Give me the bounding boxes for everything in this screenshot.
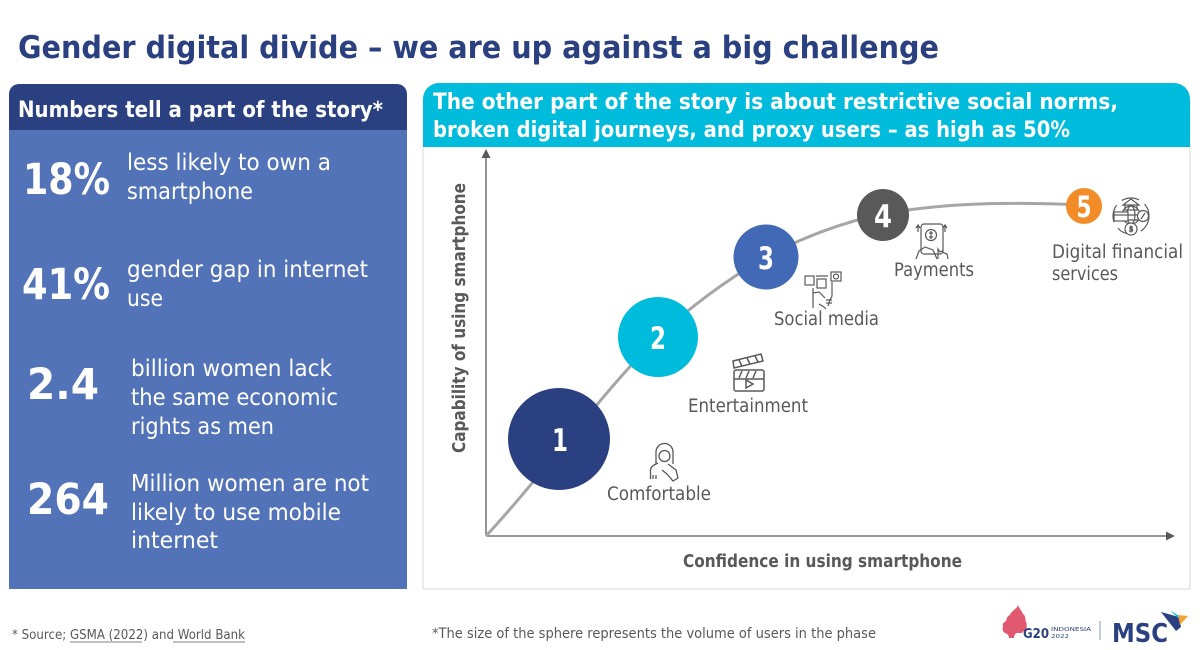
stat: 264: 264 — [27, 475, 109, 525]
icon: payments phone — [916, 224, 948, 259]
icon: clapperboard — [733, 354, 764, 391]
icon: digital finance globe — [1113, 198, 1149, 235]
label: social media: Social media — [774, 309, 879, 330]
panel heading: numbers — [9, 84, 407, 130]
stat: 41% — [22, 257, 368, 312]
label: payments: Payments — [894, 260, 974, 281]
stat: 264: internet — [131, 528, 218, 554]
icon: social media hand — [805, 272, 841, 309]
label: digital financial services: services — [1052, 264, 1118, 285]
logo divider — [1099, 621, 1101, 640]
y axis label: Capability of using smartphone — [449, 183, 470, 453]
stage 4 sphere: 4 — [874, 199, 892, 235]
panel: numbers — [9, 84, 407, 589]
logo: G20 Indonesia 2022: 2022 — [1051, 634, 1069, 640]
panel: restrictive norms chart — [423, 83, 1190, 589]
label: digital financial services — [1052, 242, 1183, 285]
stat: 264: likely to use mobile — [131, 500, 341, 526]
logo: G20 Indonesia 2022: G20 — [1023, 627, 1049, 642]
logo: G20 Indonesia 2022: INDONESIA — [1051, 627, 1091, 633]
stat: 18% — [23, 150, 331, 205]
stat: 18%: smartphone — [127, 179, 253, 205]
x axis label: Confidence in using smartphone — [683, 551, 962, 572]
stat: 2.4 — [27, 356, 338, 440]
stat: 41%: 41% — [22, 260, 110, 310]
stage 2 sphere: 2 — [650, 321, 666, 357]
stage 3 sphere: 3 — [758, 241, 774, 277]
label: digital financial services: Digital financial — [1052, 242, 1183, 263]
title: Gender digital divide – we are up against a big challenge — [18, 30, 939, 66]
stat: 18%: less likely to own a — [127, 150, 331, 176]
label: entertainment: Entertainment — [688, 396, 808, 417]
source note: * Source; GSMA (2022) and World Bank — [12, 628, 245, 643]
label: comfortable: Comfortable — [607, 484, 711, 505]
panel heading: restrictive norms: The other part of the story is about restrictive social norms, — [433, 89, 1118, 115]
stat: 2.4: rights as men — [131, 414, 274, 440]
stage 1 sphere — [508, 388, 610, 490]
stage 1 sphere: 1 — [552, 423, 568, 459]
stat: 2.4: 2.4 — [27, 360, 99, 410]
panel heading: numbers: Numbers tell a part of the story* — [18, 97, 383, 123]
adoption curve — [486, 203, 1084, 536]
stage 5 sphere — [1066, 188, 1102, 224]
stage 5 sphere: 5 — [1076, 190, 1092, 224]
chart axes — [482, 149, 1175, 540]
stat: 41%: use — [127, 286, 163, 312]
stage 3 sphere — [734, 224, 798, 290]
stat: 264: Million women are not — [131, 471, 369, 497]
icon: woman — [650, 444, 678, 481]
stat: 2.4: the same economic — [131, 385, 338, 411]
stat: 41%: gender gap in internet — [127, 257, 368, 283]
logo: MSC — [1112, 610, 1188, 649]
stat: 18%: 18% — [23, 155, 110, 205]
logo: G20 Indonesia 2022 — [1003, 605, 1091, 642]
panel heading: restrictive norms — [423, 83, 1190, 147]
stat: 2.4: billion women lack — [131, 356, 333, 382]
logo: MSC: MSC — [1112, 619, 1168, 649]
stat: 264 — [27, 471, 369, 554]
panel heading: restrictive norms: broken digital journeys, and proxy users – as high as 50% — [433, 117, 1070, 143]
stage 4 sphere — [857, 189, 909, 241]
stage 2 sphere — [618, 297, 698, 377]
sphere size footnote: *The size of the sphere represents the volume of users in the phase — [432, 626, 876, 642]
